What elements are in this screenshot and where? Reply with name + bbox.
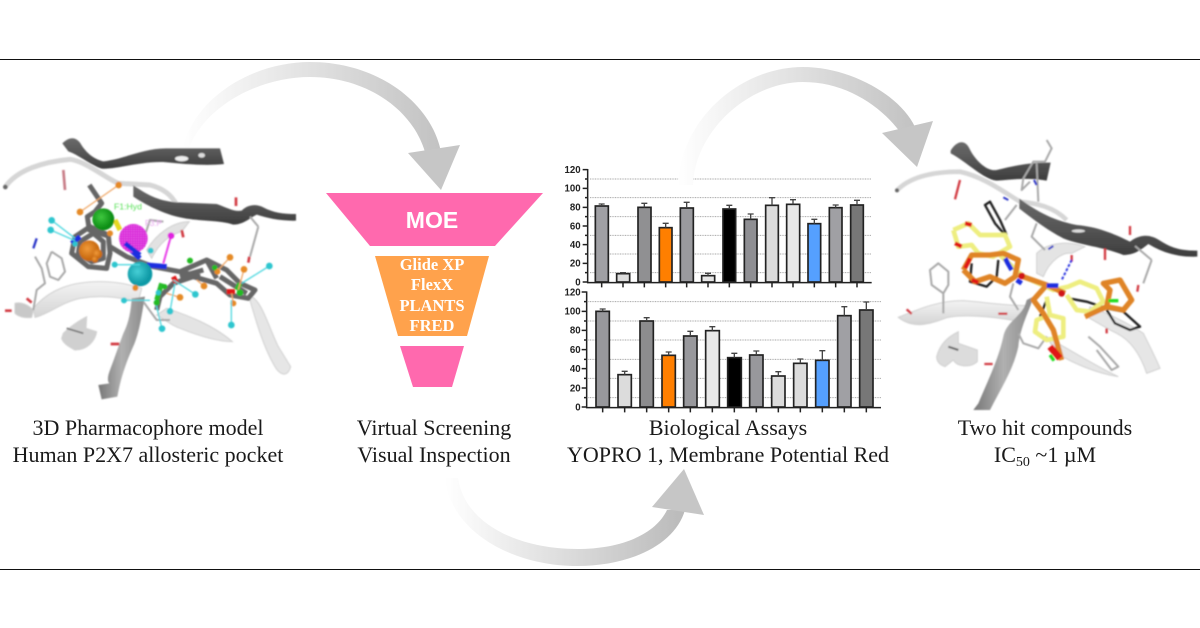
pharmacophore vectors: orange [77, 182, 247, 306]
upper chart axis labels: 60 [570, 221, 581, 232]
caption: virtual screening: Visual Inspection [357, 442, 511, 467]
protein ribbon: grey vertical strand [973, 297, 1033, 410]
panel: screening funnel [326, 193, 543, 387]
upper chart error bars [599, 198, 860, 276]
protein ribbons: light strands [898, 243, 1160, 377]
lower chart axis labels: 120 [565, 287, 581, 298]
orange ligand sticks [963, 253, 1132, 360]
panel: 3D pharmacophore model [3, 138, 296, 399]
feature label: F3: F3:P [145, 219, 162, 228]
funnel: MOE tier: MOE [406, 207, 458, 233]
ligand heteroatoms [72, 220, 240, 300]
black ligand sticks [970, 202, 1140, 330]
lower chart axis labels [565, 287, 581, 413]
panel: two hit compounds docked [895, 140, 1197, 410]
pharmacophore small green points [154, 258, 243, 306]
caption: hit compounds: ~1 µM [1030, 442, 1096, 467]
caption: pharmacophore: 3D Pharmacophore model [33, 415, 263, 440]
bar chart: lower assay [565, 287, 881, 413]
lower chart axis labels: 60 [570, 345, 581, 356]
funnel: docking programs tier: Glide XP [400, 255, 464, 274]
protein ribbon: top dark strand [62, 138, 224, 169]
caption: biological assays: YOPRO 1, Membrane Potential Red [567, 442, 889, 467]
bar chart: upper assay [565, 165, 872, 288]
caption: hit compounds: Two hit compounds [958, 415, 1132, 440]
upper chart axis labels: 0 [575, 277, 581, 288]
side chains [907, 140, 1152, 370]
pharmacophore feature: cyan sphere [128, 262, 152, 286]
caption: virtual screening: Virtual Screening [357, 415, 511, 440]
funnel: final tier [400, 346, 464, 387]
feature label: F1 Hyd: F1:Hyd [114, 201, 142, 211]
lower chart axis labels: 40 [570, 364, 581, 375]
lower chart error bars [600, 302, 869, 376]
pharmacophore feature: magenta sphere [119, 224, 174, 263]
lower chart axes and ticks [582, 291, 881, 412]
lower chart axis labels: 20 [570, 383, 581, 394]
yellow ligand sticks [953, 223, 1103, 340]
caption: hit compounds: IC [994, 442, 1096, 470]
funnel: MOE tier [326, 193, 543, 246]
caption: hit compounds: 50 [1016, 455, 1030, 470]
thin light ribbon [3, 159, 177, 205]
protein ribbons: light strands [15, 222, 291, 374]
lower chart axis labels: 0 [575, 402, 581, 413]
top rule [0, 59, 1200, 60]
funnel: docking programs tier [375, 255, 489, 336]
ligand heteroatoms [955, 223, 1118, 361]
side chains [5, 170, 258, 344]
arrow: screening to assays [445, 469, 704, 566]
ligand overlay: grey sticks [72, 185, 255, 310]
protein ribbon: second dark strand [133, 185, 296, 225]
protein ribbon: second dark strand [1019, 199, 1197, 257]
upper chart axis labels: 100 [565, 184, 581, 195]
protein ribbon: top dark strand [951, 142, 1051, 181]
caption: pharmacophore: Human P2X7 allosteric pocket [13, 442, 283, 467]
lower chart axis labels: 100 [565, 307, 581, 318]
upper chart axis labels: 40 [570, 240, 581, 251]
upper chart bars [595, 204, 863, 282]
protein ribbon: grey vertical strand [98, 297, 145, 399]
caption: biological assays: Biological Assays [649, 415, 807, 440]
pharmacophore feature: orange sphere [79, 240, 102, 263]
funnel: docking programs tier: FlexX [411, 275, 453, 294]
pharmacophore feature: green sphere [92, 208, 114, 230]
funnel: docking programs tier: FRED [410, 316, 455, 335]
bottom rule [0, 569, 1200, 570]
upper chart axes and ticks [583, 169, 872, 287]
upper chart axis labels: 80 [570, 203, 581, 214]
pharmacophore vectors: cyan [47, 217, 273, 332]
upper chart axis labels [565, 165, 581, 288]
upper chart axis labels: 20 [570, 259, 581, 270]
arrow: assays to hit compounds [678, 67, 933, 185]
lower chart bars [596, 310, 873, 407]
thin light ribbon [895, 172, 1067, 220]
arrow: pharmacophore to screening [182, 62, 460, 190]
funnel: docking programs tier: PLANTS [399, 296, 465, 315]
upper chart axis labels: 120 [565, 165, 581, 176]
lower chart axis labels: 80 [570, 326, 581, 337]
